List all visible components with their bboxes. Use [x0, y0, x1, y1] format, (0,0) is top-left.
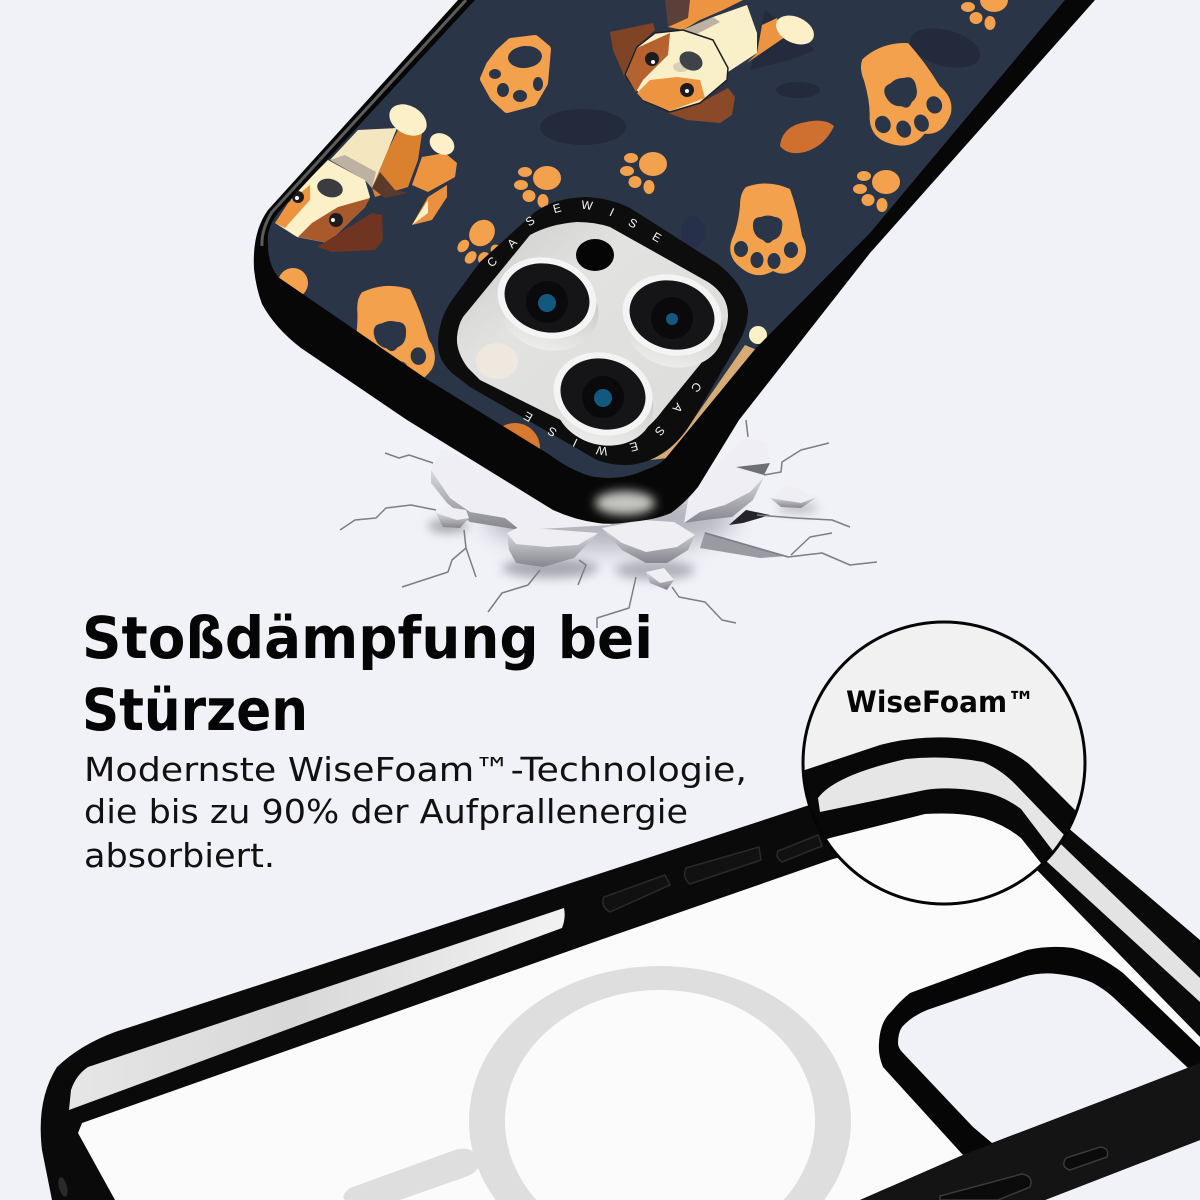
lens right [613, 263, 733, 379]
phone with dog-pattern case [254, 0, 1095, 524]
magnifier background [803, 622, 1085, 904]
puppy paw [776, 16, 814, 44]
camera cutout frame [879, 947, 1200, 1155]
case black bumper [254, 0, 1095, 524]
flash [476, 343, 518, 379]
big paw 3 [860, 43, 952, 146]
head [275, 160, 370, 243]
headline: Stürzen [82, 676, 308, 744]
foam strip right [1020, 824, 1200, 1002]
small rock right [770, 497, 817, 508]
headline: Stoßdämpfung bei [82, 604, 653, 672]
left raised plate [431, 449, 612, 530]
lower port openings [940, 1147, 1108, 1200]
magnet alignment bar [343, 1149, 479, 1200]
puppy top [610, 0, 819, 123]
dark smudges [540, 109, 626, 145]
body text: die bis zu 90% der Aufprallenergie [84, 792, 688, 831]
small paws [620, 152, 667, 194]
brand text bottom of camera ring: CASEWISE [521, 379, 704, 458]
body text: absorbiert. [84, 836, 275, 875]
haunch and body [412, 153, 457, 192]
right raised plate [684, 437, 770, 523]
callout label: WiseFoam™ [846, 685, 1035, 719]
body shadow [750, 10, 815, 70]
lens top left [488, 246, 608, 362]
headline [82, 604, 653, 744]
rock shadows [502, 558, 598, 578]
puppy ears [610, 23, 655, 78]
grey rim edge [262, 0, 466, 246]
puppy left [275, 98, 458, 252]
clear back panel [78, 830, 1200, 1200]
small rock left [436, 513, 469, 528]
orange clipped shape [503, 423, 540, 449]
small hole left edge [57, 1176, 69, 1198]
cream puppy strip [650, 345, 757, 460]
sensor hole [576, 239, 614, 271]
eyes and nose [292, 191, 304, 203]
camera cutout opening [898, 973, 1188, 1143]
magnetic ring [469, 966, 851, 1200]
body text: Modernste WiseFoam™-Technologie, [84, 750, 747, 789]
black case frame [41, 760, 1200, 1200]
small rock bottom [646, 572, 674, 590]
body text [84, 750, 747, 875]
puppy eyes and nose [645, 52, 659, 66]
crack lines [340, 420, 877, 628]
bumper gloss highlight [595, 491, 655, 515]
orange corner paw [279, 268, 308, 294]
rock chunk left [507, 533, 598, 567]
puppy body [667, 0, 743, 30]
big paw 1 [484, 39, 547, 109]
clear case inside view [41, 760, 1200, 1200]
navy printed back [268, 0, 1065, 478]
side buttons [603, 835, 822, 912]
camera surround black ring [438, 197, 748, 465]
magnified case corner [804, 737, 1076, 902]
rear paws [389, 104, 427, 136]
foam strip left [69, 908, 565, 1110]
cracked ground under the phone [340, 420, 877, 628]
big paw 4 [356, 286, 435, 378]
puppy head [625, 30, 728, 112]
big paw 2 [730, 183, 806, 275]
tail [412, 185, 447, 225]
brand text top of camera ring: CASEWISE [484, 198, 664, 270]
silver camera plate [457, 222, 728, 440]
orange seed [780, 121, 834, 153]
impact shadow [485, 490, 735, 550]
WiseFoam magnifier callout [802, 620, 1086, 906]
bottom band of frame [860, 1063, 1200, 1200]
dog and paw pattern [275, 0, 1008, 473]
rock chunk centre [602, 528, 695, 563]
lens bottom [544, 341, 663, 457]
magnifier outline [803, 622, 1085, 904]
